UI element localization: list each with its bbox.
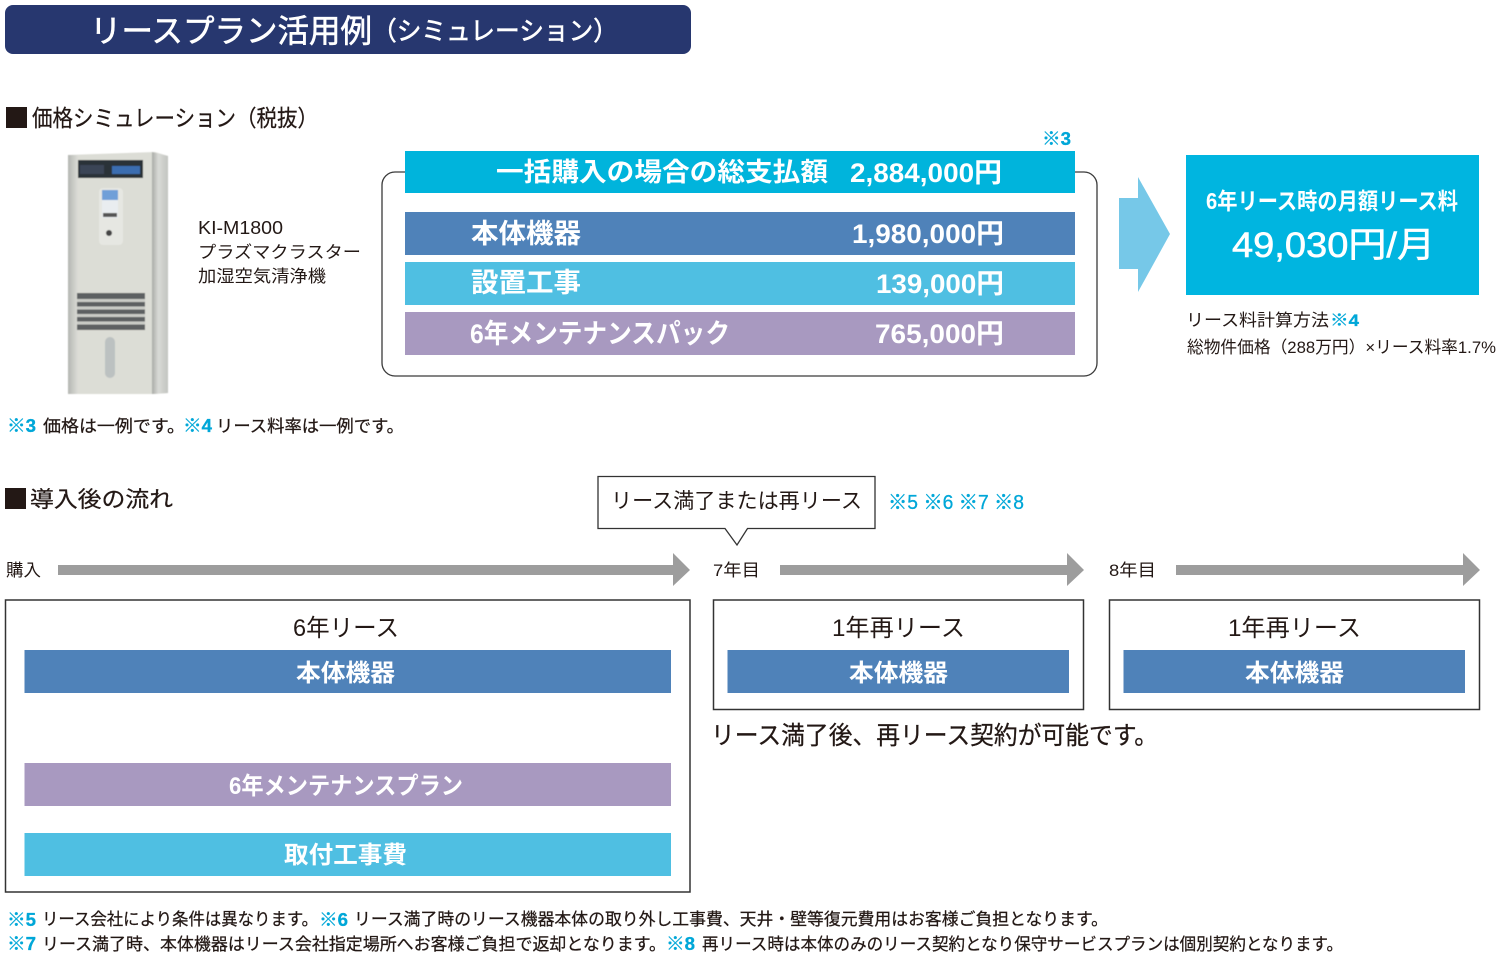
- heading: price simulation: 価格シミュレーション（税抜）: [32, 105, 318, 131]
- heading: flow after introduction: 導入後の流れ: [30, 487, 173, 512]
- footnote: 3 and 4: リース料率は一例です。: [216, 417, 404, 436]
- footnote: 5 and 6: リース満了時のリース機器本体の取り外し工事費、天井・壁等復元費用はお客様ご負担となります。: [354, 910, 1108, 929]
- footnote: 5 and 6: [7, 910, 1108, 930]
- title banner: （シミュレーション）: [372, 16, 618, 46]
- product label: [198, 218, 361, 286]
- bar: main unit: 本体機器: [296, 660, 395, 687]
- bar: maintenance pack: 765,000円: [875, 319, 1004, 349]
- timeline: year 7: [713, 553, 1084, 586]
- bar: installation cost: [24, 833, 671, 876]
- panel: 1 year re-lease (year 8): 1年再リース: [1228, 615, 1361, 642]
- title banner: リースプラン活用例: [90, 13, 372, 49]
- lease calculation note: リース料計算方法: [1186, 311, 1329, 330]
- bar: maintenance plan: [24, 763, 671, 806]
- callout: lease end or re-lease: リース満了または再リース: [611, 490, 862, 513]
- timeline: year 8: 8年目: [1109, 561, 1156, 580]
- bar: total price: 一括購入の場合の総支払額: [496, 157, 828, 187]
- footnote: 3 and 4: [7, 416, 404, 436]
- timeline: year 8: [1109, 553, 1480, 586]
- footnote: 7 and 8: ※8: [666, 934, 695, 954]
- footnote: 5 and 6: ※5: [7, 910, 36, 930]
- panel: monthly lease fee: [1186, 155, 1479, 295]
- bar: installation: [405, 262, 1075, 305]
- footnote: 7 and 8: リース満了時、本体機器はリース会社指定場所へお客様ご負担で返却となります。: [42, 935, 666, 954]
- footnote: 3 and 4: ※3: [7, 416, 36, 436]
- footnote: 7 and 8: ※7: [7, 934, 36, 954]
- panel: 1 year re-lease (year 7): 1年再リース: [832, 615, 965, 642]
- footnote: 3 and 4: ※4: [183, 416, 212, 436]
- footnote marks 5-8: ※5 ※6 ※7 ※8: [888, 492, 1024, 514]
- arrow: to monthly fee: [1119, 177, 1170, 292]
- bracket frame: [382, 172, 1097, 376]
- panel: 6 year lease: [6, 600, 690, 892]
- panel: 1 year re-lease (year 7): [714, 600, 1084, 710]
- panel: monthly lease fee: 6年リース時の月額リース料: [1206, 188, 1458, 214]
- title banner: [5, 5, 691, 54]
- lease calculation note: [1186, 311, 1496, 357]
- bar: main unit: 本体機器: [1245, 660, 1344, 687]
- product label: KI-M1800: [198, 218, 283, 238]
- note: re-lease available: リース満了後、再リース契約が可能です。: [711, 722, 1158, 750]
- timeline: year 7: 7年目: [713, 561, 760, 580]
- bar: main unit: 1,980,000円: [852, 219, 1004, 249]
- bar: main unit: 本体機器: [471, 219, 581, 249]
- bar: total price: 2,884,000円: [850, 158, 1002, 188]
- panel: 1 year re-lease (year 8): [1110, 600, 1480, 710]
- timeline: purchase: [6, 553, 690, 586]
- product label: プラズマクラスター: [198, 243, 361, 262]
- bar: maintenance pack: 6年メンテナンスパック: [470, 319, 730, 349]
- bar: main unit: [405, 212, 1075, 255]
- lease calculation note: ※4: [1330, 311, 1360, 330]
- timeline: purchase: 購入: [6, 561, 41, 580]
- footnote: 5 and 6: ※6: [319, 910, 348, 930]
- bar: maintenance pack: [405, 312, 1075, 355]
- bar: installation: 139,000円: [876, 269, 1004, 299]
- panel: monthly lease fee: 49,030円/月: [1232, 226, 1435, 265]
- panel: price breakdown: [382, 129, 1097, 376]
- footnote: 7 and 8: [7, 934, 1343, 954]
- bar: main unit: [1124, 650, 1465, 693]
- bar: main unit: 本体機器: [849, 660, 948, 687]
- footnote: 3 and 4: 価格は一例です。: [43, 417, 185, 436]
- footnote: 5 and 6: リース会社により条件は異なります。: [42, 910, 318, 929]
- panel: 6 year lease: 6年リース: [293, 615, 399, 642]
- bar: main unit: [728, 650, 1069, 693]
- bar: installation cost: 取付工事費: [284, 842, 407, 869]
- bar: installation: 設置工事: [471, 268, 581, 298]
- bar: total price: [405, 151, 1075, 193]
- product label: 加湿空気清浄機: [198, 267, 326, 286]
- footnote: 7 and 8: 再リース時は本体のみのリース契約となり保守サービスプランは個別契約となります。: [702, 935, 1343, 954]
- lease calculation note: 総物件価格（288万円）×リース料率1.7%: [1187, 338, 1496, 357]
- icon: air purifier unit: [68, 152, 168, 394]
- footnote mark 3: ※3: [1042, 129, 1071, 149]
- callout: lease end or re-lease: [598, 476, 875, 545]
- bar: maintenance plan: 6年メンテナンスプラン: [229, 773, 463, 800]
- bar: main unit: [24, 650, 671, 693]
